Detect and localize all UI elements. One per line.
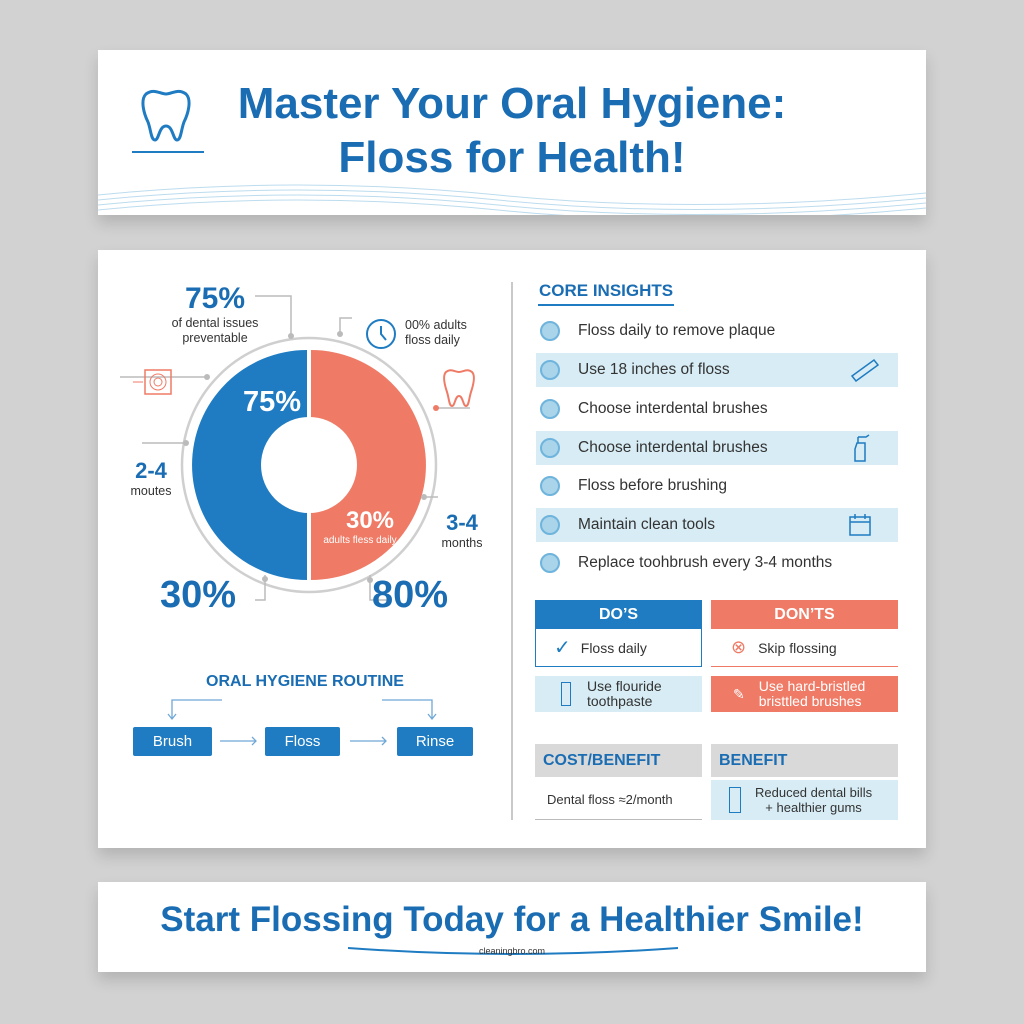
cost benefit table: COST/BENEFIT <box>543 752 660 768</box>
cost benefit table: Dental floss ≈2/month <box>547 792 673 807</box>
step: Brush: Brush <box>153 733 192 750</box>
stat: adults floss daily: 00% adults <box>405 318 467 332</box>
footer tagline: Start Flossing Today for a Healthier Smile! <box>160 900 864 939</box>
dos and donts table: Use hard-bristled <box>759 678 865 694</box>
stat: 3-4 months <box>442 510 482 550</box>
insights list <box>536 321 898 573</box>
stat: 75% top: preventable <box>182 331 248 345</box>
cost benefit table: Reduced dental bills <box>755 785 872 800</box>
header card <box>98 50 926 215</box>
icon: clock <box>366 319 396 349</box>
stat: 75% top <box>172 282 258 345</box>
donut chart: adults fless daily <box>323 535 397 546</box>
insights list: Use 18 inches of floss <box>578 361 730 378</box>
donut chart: 30% <box>346 507 394 534</box>
dos and donts table <box>535 600 898 712</box>
routine title: ORAL HYGIENE ROUTINE <box>206 673 404 690</box>
cost benefit table: + healthier gums <box>765 800 862 815</box>
dos and donts table: ✎ <box>733 686 745 702</box>
insights list: Replace toohbrush every 3-4 months <box>578 554 832 571</box>
dos and donts table: toothpaste <box>587 693 652 709</box>
stat: adults floss daily: floss daily <box>405 333 460 347</box>
insights list: Choose interdental brushes <box>578 439 768 456</box>
stat: 3-4 months: 3-4 <box>446 510 478 535</box>
insights list: Floss daily to remove plaque <box>578 322 775 339</box>
stat: 2-4 moutes <box>130 458 172 498</box>
insights list: Maintain clean tools <box>578 516 715 533</box>
dos and donts table: DON’TS <box>774 606 835 622</box>
dos and donts table: Floss daily <box>581 640 647 656</box>
title: Floss for Health! <box>338 133 686 182</box>
dos and donts table: Skip flossing <box>758 640 837 656</box>
title: Master Your Oral Hygiene: <box>238 79 786 128</box>
cost benefit table: BENEFIT <box>719 752 787 768</box>
dos and donts table: Use flouride <box>587 678 662 694</box>
step: Rinse: Rinse <box>416 733 454 750</box>
stat: adults floss daily <box>405 318 467 347</box>
dos and donts table: DO’S <box>599 606 638 622</box>
step: Floss: Floss <box>285 733 320 750</box>
title <box>238 79 786 182</box>
footer card <box>98 882 926 972</box>
dos and donts table: ✓ <box>554 637 571 659</box>
stat: 3-4 months: months <box>442 536 482 550</box>
footer card: cleaningbro.com <box>479 946 545 956</box>
stat: 2-4 moutes: 2-4 <box>135 458 167 483</box>
donut chart <box>120 295 470 601</box>
step: Brush <box>133 727 212 756</box>
routine arrows <box>168 699 436 746</box>
donut chart: 75% <box>243 386 301 418</box>
core insights heading: CORE INSIGHTS <box>539 281 673 300</box>
step: Rinse <box>397 727 473 756</box>
icon: tooth red <box>443 369 475 407</box>
main card <box>98 250 926 848</box>
stat: 75% top: of dental issues <box>172 316 258 330</box>
dos and donts table: ⊗ <box>731 637 746 657</box>
insights list: Floss before brushing <box>578 477 727 494</box>
icon: floss box <box>133 369 172 395</box>
insights list: Choose interdental brushes <box>578 400 768 417</box>
stat: 80%: 80% <box>372 574 448 616</box>
stat: 2-4 moutes: moutes <box>130 484 172 498</box>
icon: tooth <box>132 90 204 153</box>
stat: 30%: 30% <box>160 574 236 616</box>
dos and donts table: bristtled brushes <box>759 693 861 709</box>
step: Floss <box>265 727 340 756</box>
stat: 75% top: 75% <box>185 282 245 315</box>
